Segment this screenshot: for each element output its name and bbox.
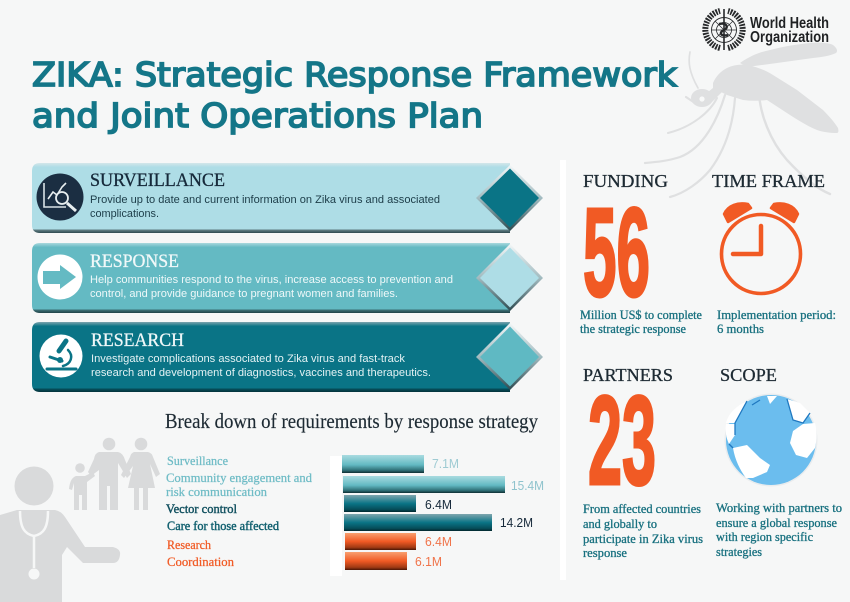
description: Investigate complications associated to Zika virus and fast-track [91, 353, 405, 365]
description: Provide up to date and current information on Zika virus and associated [90, 194, 440, 206]
description [580, 308, 702, 336]
description: ensure a global response [716, 516, 837, 530]
bar value labels: 6.1M [415, 555, 442, 569]
description: Help communities respond to the virus, increase access to prevention and [90, 274, 453, 286]
chart legend labels: Community engagement and [166, 471, 313, 485]
chart legend labels: Surveillance [167, 454, 228, 468]
bar value labels: 6.4M [425, 535, 452, 549]
heading: SCOPE [720, 365, 777, 385]
diamond [476, 165, 543, 231]
icon: arrow [38, 254, 82, 300]
bar chart [330, 455, 544, 576]
chart heading: Break down of requirements by response strategy [165, 409, 538, 433]
WHO wordmark: World Health [750, 15, 829, 32]
description: research and development of diagnostics, vaccines and therapeutics. [91, 367, 431, 379]
land: Europe [787, 399, 810, 423]
description [583, 502, 703, 560]
land: Greenland [767, 396, 777, 404]
chart legend labels: Care for those affected [167, 519, 280, 533]
WHO wordmark: Organization [750, 29, 829, 46]
diamond [476, 323, 543, 390]
bar value labels: 15.4M [511, 479, 544, 493]
heading: FUNDING [583, 171, 668, 191]
description: and globally to [583, 517, 657, 531]
white column divider [560, 160, 566, 580]
description [717, 308, 836, 336]
diamond [476, 244, 543, 311]
WHO logo [705, 9, 829, 50]
description: Implementation period: [717, 308, 836, 322]
heading: PARTNERS [583, 365, 673, 385]
WHO emblem [705, 9, 743, 50]
WHO wordmark [750, 15, 829, 46]
panel: scope [716, 365, 842, 559]
chart legend labels: risk communication [166, 485, 268, 499]
panel: time frame [712, 171, 836, 336]
heading: SURVEILLANCE [90, 170, 225, 191]
description: the strategic response [580, 322, 686, 336]
icon: family silhouette [69, 438, 160, 510]
description: with region specific [716, 530, 813, 544]
icon: alarm clock [722, 203, 800, 294]
bar value labels: 6.4M [425, 498, 452, 512]
description: complications. [90, 208, 159, 220]
panel: surveillance [32, 163, 543, 233]
panel: response [32, 243, 543, 313]
description [716, 501, 842, 559]
description: response [583, 546, 627, 560]
description [91, 353, 431, 379]
panel: partners: 23 [588, 370, 656, 511]
description [90, 194, 440, 220]
chart legend labels: Research [167, 538, 212, 552]
heading: TIME FRAME [712, 171, 825, 191]
description: From affected countries [583, 502, 701, 516]
description [90, 274, 453, 300]
title [32, 55, 678, 135]
icon: chart and magnifier [36, 174, 84, 220]
description: Working with partners to [716, 501, 842, 515]
bar value labels: 14.2M [500, 516, 533, 530]
description: control, and provide guidance to pregnant women and families. [90, 288, 398, 300]
land: South America [733, 445, 770, 478]
heading: RESPONSE [90, 251, 179, 272]
icon: microscope [40, 334, 82, 378]
description: 6 months [717, 322, 764, 336]
description: Million US$ to complete [580, 308, 702, 322]
chart legend labels [166, 454, 313, 569]
panel: funding: 56 [583, 182, 650, 323]
description: participate in Zika virus [583, 532, 703, 546]
bar value labels [415, 457, 544, 569]
panel: research [32, 322, 543, 392]
icon: doctor silhouette [0, 466, 120, 602]
chart legend labels: Coordination [167, 555, 235, 569]
title: and Joint Operations Plan [32, 96, 483, 135]
land: Africa [790, 423, 816, 458]
chart legend labels: Vector control [166, 502, 238, 516]
mosquito illustration [645, 43, 838, 197]
description: strategies [716, 545, 762, 559]
land: North America [726, 401, 747, 423]
title: ZIKA: Strategic Response Framework [32, 55, 678, 94]
heading: RESEARCH [91, 330, 184, 351]
panel: partners [583, 365, 703, 560]
icon: globe [724, 394, 818, 486]
bar value labels: 7.1M [432, 457, 459, 471]
